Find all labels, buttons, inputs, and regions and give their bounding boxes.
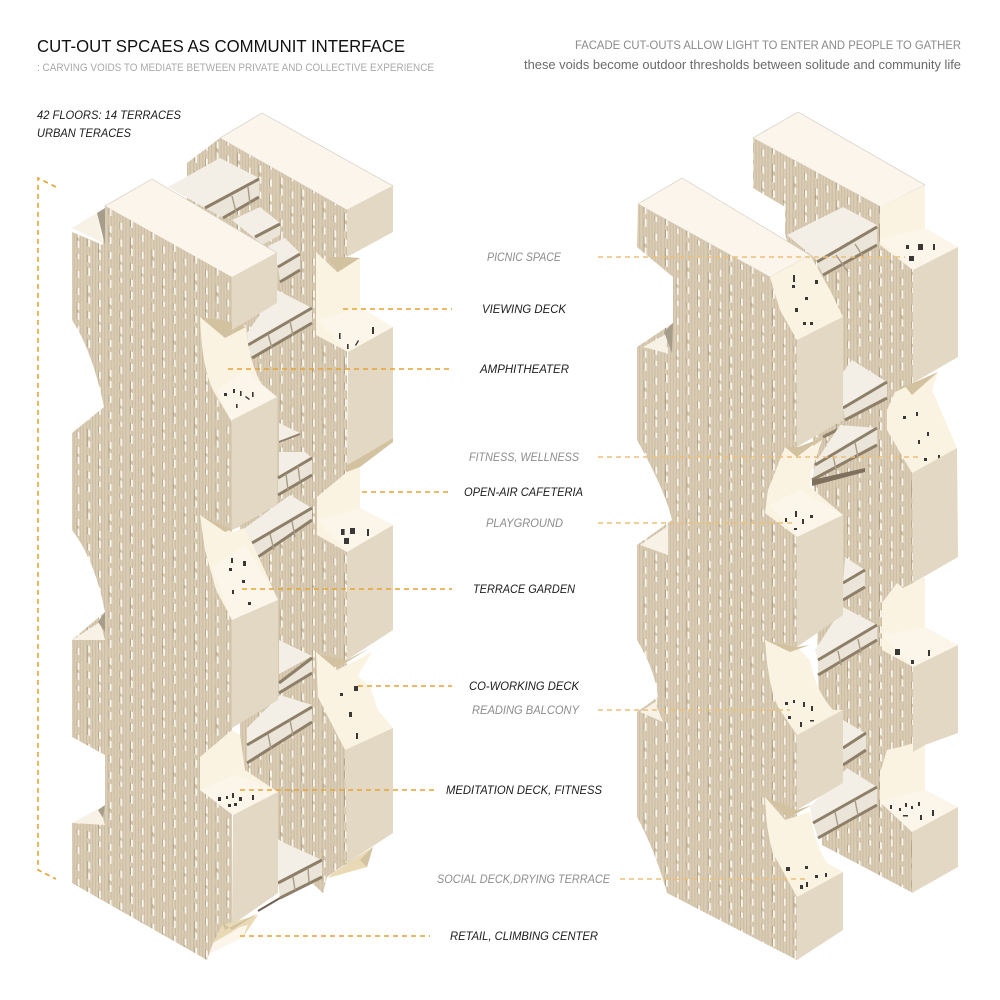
right wing side faces	[345, 186, 393, 863]
labels: FITNESS, WELLNESS	[469, 450, 579, 464]
right tower	[637, 112, 958, 960]
front wing side faces	[232, 253, 278, 925]
side terrace notches	[72, 208, 105, 825]
bridge decks	[168, 158, 322, 911]
front wing side faces	[797, 317, 843, 960]
labels: PICNIC SPACE	[487, 250, 562, 264]
floors note: URBAN TERACES	[37, 126, 131, 140]
front void: playground	[765, 438, 843, 537]
side terrace notches	[640, 323, 673, 722]
front wing roof	[105, 179, 277, 278]
right wing base	[328, 847, 373, 878]
labels: MEDITATION DECK, FITNESS	[446, 783, 602, 797]
front void: terrace garden	[200, 515, 278, 620]
rear wing facade	[753, 138, 913, 893]
title: CUT-OUT SPCAES AS COMMUNIT INTERFACE	[37, 36, 405, 56]
labels: RETAIL, CLIMBING CENTER	[450, 929, 598, 943]
right wing side faces	[912, 247, 958, 893]
right wing void: open-air cafeteria	[317, 438, 393, 552]
labels: CO-WORKING DECK	[469, 679, 580, 693]
labels: READING BALCONY	[472, 703, 580, 717]
right wing void: co-working deck	[316, 648, 393, 750]
subtitle: : CARVING VOIDS TO MEDIATE BETWEEN PRIVATE AND COLLECTIVE EXPERIENCE	[37, 62, 434, 74]
labels: TERRACE GARDEN	[473, 582, 575, 596]
right wing void: fitness	[887, 372, 957, 473]
intro line one: FACADE CUT-OUTS ALLOW LIGHT TO ENTER AND PEOPLE TO GATHER	[575, 38, 961, 52]
front void: amphitheater	[200, 317, 277, 422]
front void: picnic terrace	[770, 255, 843, 340]
left tower	[72, 113, 393, 960]
front wing facade	[72, 206, 232, 960]
intro line two: these voids become outdoor thresholds between solitude and community life	[524, 58, 961, 72]
front wing roof	[638, 178, 810, 277]
front wing facade	[637, 204, 797, 960]
right wing void: lower arch	[880, 740, 958, 832]
rear wing roof	[220, 113, 393, 210]
floors note	[37, 108, 181, 140]
front void: reading balcony	[765, 640, 843, 735]
floors note: 42 FLOORS: 14 TERRACES	[37, 108, 181, 122]
right wing void: upper arch	[882, 577, 958, 667]
labels: OPEN-AIR CAFETERIA	[464, 485, 583, 499]
leader lines	[228, 257, 922, 936]
labels: PLAYGROUND	[486, 516, 563, 530]
right wing column: picnic space void	[880, 185, 958, 270]
front void: meditation deck	[200, 730, 278, 815]
labels	[437, 250, 611, 943]
rear wing facade	[187, 138, 347, 893]
labels: AMPHITHEATER	[479, 362, 569, 376]
base void: retail	[210, 913, 258, 953]
labels: SOCIAL DECK,DRYING TERRACE	[437, 872, 611, 886]
front void: social deck	[765, 797, 843, 897]
bridge decks	[787, 207, 887, 838]
height bracket	[38, 178, 56, 879]
right wing void: viewing deck	[316, 252, 393, 352]
rear wing roof	[753, 112, 925, 207]
labels: VIEWING DECK	[482, 302, 567, 316]
